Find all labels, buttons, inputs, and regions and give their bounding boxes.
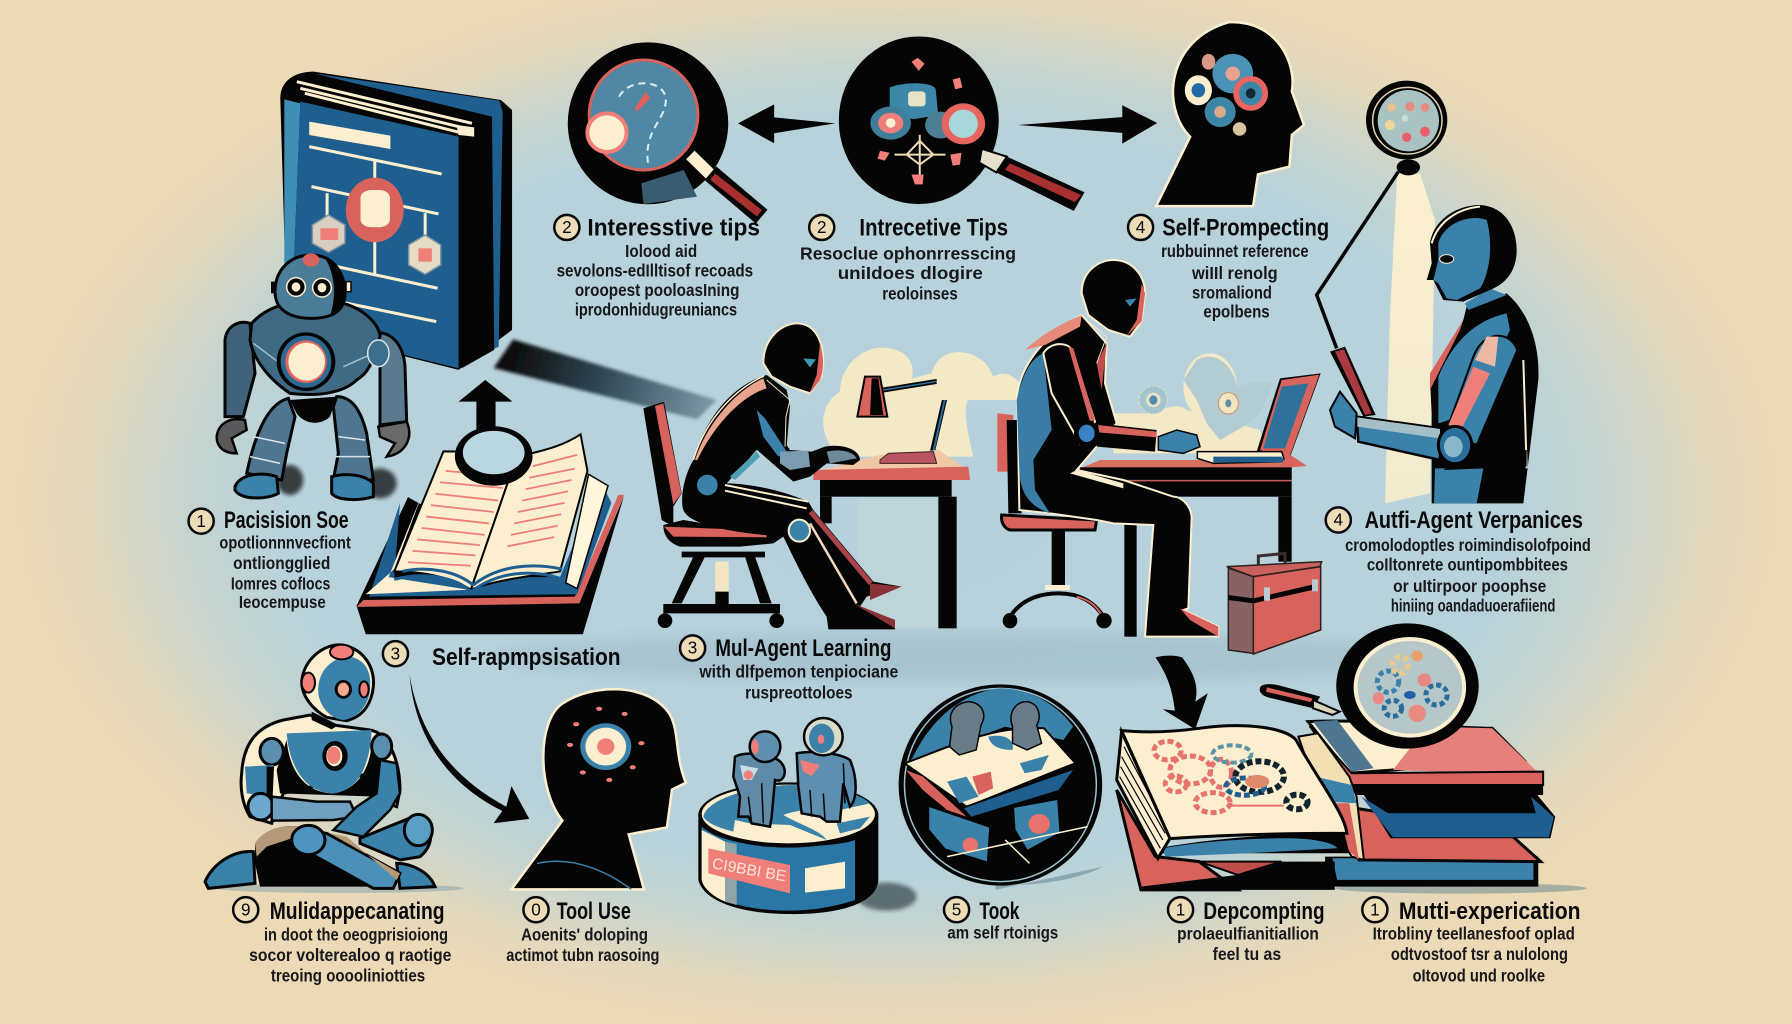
step: Self-Prompecting: rubbuinnet reference <box>1161 241 1309 261</box>
step: Pacisision Soe: 1 <box>196 511 206 531</box>
step: Pacisision Soe: Pacisision Soe <box>224 507 349 534</box>
chair <box>643 402 784 628</box>
pedestal label: CI9BBI BE <box>711 856 787 885</box>
arrow left <box>738 104 835 143</box>
step: Mutti-experication: oItovod und roolke <box>1413 966 1545 986</box>
step: Mul-Agent Learning <box>680 635 898 702</box>
step: Pacisision Soe: ontliongglied <box>233 553 330 573</box>
step: Tool Use: Tool Use <box>557 898 631 925</box>
step: Mulidappecanating: treoing ooooliniotties <box>271 966 425 986</box>
magnifier <box>1260 623 1479 749</box>
step: Autfi-Agent Verpanices: 4 <box>1334 510 1344 530</box>
step: Depcompting: feel tu as <box>1213 944 1281 964</box>
open book with gears <box>1117 726 1349 890</box>
step: Intrecetive Tips: reoloinses <box>882 283 958 303</box>
step: Pacisision Soe <box>189 507 351 612</box>
step: Mulidappecanating: Mulidappecanating <box>270 898 445 925</box>
person with magnifier and light beam <box>1317 81 1539 503</box>
laptop <box>1197 373 1321 467</box>
step: Self-Prompecting: 4 <box>1136 217 1146 237</box>
robot seated <box>205 645 463 893</box>
arrow: curved into Tool Use head <box>410 674 529 823</box>
step: Took: 5 <box>952 899 961 919</box>
step: Autfi-Agent Verpanices: cromolodoptles roimindisolofpoind <box>1345 535 1591 555</box>
step: Tool Use: actimot tubn raosoing <box>506 945 659 965</box>
body <box>1017 315 1218 637</box>
chair <box>997 413 1112 628</box>
step: Tool Use: 0 <box>531 899 541 919</box>
step: Autfi-Agent Verpanices <box>1326 507 1591 615</box>
step: Self-Prompecting: sromaliond <box>1192 282 1272 302</box>
person at desk right <box>937 260 1322 654</box>
step: Mulidappecanating: socor volterealoo q raotige <box>249 945 452 965</box>
step: Intrecetive Tips <box>800 214 1016 303</box>
step: Interesstive tips: oroopest pooloasIning <box>575 280 739 300</box>
silhouette head with one gear <box>511 689 686 889</box>
step: Self-rapmpsisation <box>383 641 621 671</box>
step: Mutti-experication <box>1362 897 1581 986</box>
step: Mul-Agent Learning: with dlfpemon tenpiociane <box>699 662 898 682</box>
step: Interesstive tips: sevolons-edIlltisof recoads <box>557 261 753 281</box>
step: Pacisision Soe: Ieocempuse <box>239 592 326 612</box>
step: Mutti-experication: Mutti-experication <box>1399 898 1581 925</box>
pedestal label <box>708 848 790 893</box>
step: Interesstive tips: Iolood aid <box>625 241 697 261</box>
step: Took: Took <box>979 898 1020 925</box>
circle: robots on a book with boxes <box>899 684 1103 890</box>
step: Mulidappecanating <box>233 897 452 986</box>
step: Intrecetive Tips: uniIdoes dlogire <box>838 263 983 283</box>
step: Mul-Agent Learning: 3 <box>688 638 697 658</box>
desk <box>1077 455 1307 637</box>
light beam <box>1385 173 1435 503</box>
clouds and ghost head <box>937 353 1273 453</box>
step: Pacisision Soe: Iomres cofIocs <box>231 574 330 594</box>
step: Autfi-Agent Verpanices: or uItirpoor poophse <box>1393 576 1546 596</box>
pedestal with two robots <box>698 718 917 914</box>
two small robots <box>733 718 856 827</box>
step: Took <box>944 897 1058 942</box>
circle: network of nodes with magnifier <box>839 36 1084 211</box>
step: Tool Use <box>506 897 659 965</box>
step: Autfi-Agent Verpanices: Autfi-Agent Verpanices <box>1365 507 1583 534</box>
step: Autfi-Agent Verpanices: hiniing oandaduoerafiiend <box>1391 595 1555 615</box>
step: Interesstive tips: Interesstive tips <box>587 214 760 241</box>
step: Interesstive tips <box>554 214 760 319</box>
body and legs <box>682 375 902 629</box>
step: Self-Prompecting: epolbens <box>1203 302 1270 322</box>
head <box>1427 205 1517 302</box>
step: Mul-Agent Learning: ruspreottoloes <box>745 682 853 702</box>
step: Mutti-experication: odtvostoof tsr a nulolong <box>1391 944 1568 964</box>
step: Depcompting: 1 <box>1176 899 1185 919</box>
step: Mulidappecanating: in doot the oeogprisioiong <box>264 925 448 945</box>
open book with magnifier <box>357 426 624 634</box>
step: Interesstive tips: iprodonhidugreuniancs <box>575 299 737 319</box>
book shadow <box>494 339 717 419</box>
illustration: standing book with diagram <box>280 72 512 370</box>
head <box>1082 260 1145 337</box>
step: Self-Prompecting: wiIIl renolg <box>1191 263 1278 283</box>
step: Mutti-experication: Itrobliny teeIlanesfoof oplad <box>1373 923 1575 943</box>
step: Intrecetive Tips: Intrecetive Tips <box>859 214 1008 241</box>
step: Took: am self rtoinigs <box>947 922 1058 942</box>
arrow up <box>459 380 513 430</box>
arm <box>730 403 860 482</box>
body <box>1430 293 1539 503</box>
step: Mulidappecanating: 9 <box>241 899 250 919</box>
step: Intrecetive Tips: Resoclue ophonrresscing <box>800 243 1016 263</box>
arm with handle <box>1330 336 1517 464</box>
step: Autfi-Agent Verpanices: coIltonrete ountipombbitees <box>1367 554 1568 574</box>
circle: magnifier with question mark <box>568 42 762 217</box>
floor shading <box>491 632 1451 682</box>
briefcase <box>1227 553 1322 654</box>
step: Interesstive tips: 2 <box>562 217 572 237</box>
step: Mul-Agent Learning: Mul-Agent Learning <box>715 635 891 662</box>
step: Depcompting: prolaeuIfianitiaIlion <box>1177 923 1319 943</box>
person at desk left <box>643 323 977 629</box>
head <box>763 323 823 447</box>
desk <box>813 450 970 628</box>
stack of books with magnifier <box>1260 623 1587 894</box>
magnifier on stick <box>1317 81 1447 348</box>
step: Self-rapmpsisation: 3 <box>391 643 400 663</box>
arrow: curved into book <box>1155 656 1208 729</box>
cloud and lamp <box>823 348 977 628</box>
step: Self-Prompecting: Self-Prompecting <box>1162 214 1329 241</box>
silhouette head with gears <box>1156 22 1304 206</box>
step: Self-Prompecting <box>1128 214 1329 322</box>
step: Tool Use: Aoenits' doloping <box>521 925 648 945</box>
step: Pacisision Soe: opotlionnnvecfiont <box>219 533 351 553</box>
arrow right <box>1018 105 1157 144</box>
step: Depcompting <box>1168 897 1325 964</box>
step: Depcompting: Depcompting <box>1203 898 1325 925</box>
step: Self-rapmpsisation: Self-rapmpsisation <box>432 644 621 671</box>
step: Mutti-experication: 1 <box>1370 899 1380 919</box>
step: Intrecetive Tips: 2 <box>817 217 826 237</box>
arm <box>1043 344 1200 453</box>
robot standing <box>217 253 409 500</box>
